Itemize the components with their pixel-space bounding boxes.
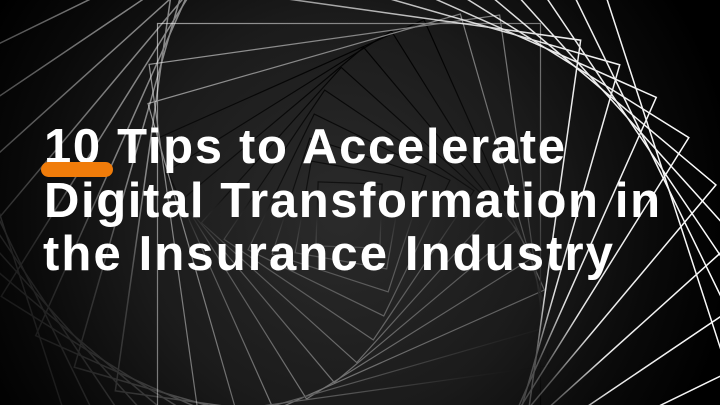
title: the Insurance Industry [43,227,613,281]
title: 10 Tips to Accelerate [44,120,565,174]
inner dark spiral of rotated squares [148,14,550,405]
orange highlight under number [41,162,113,177]
title [41,120,660,281]
title: Digital Transformation in [44,174,660,228]
